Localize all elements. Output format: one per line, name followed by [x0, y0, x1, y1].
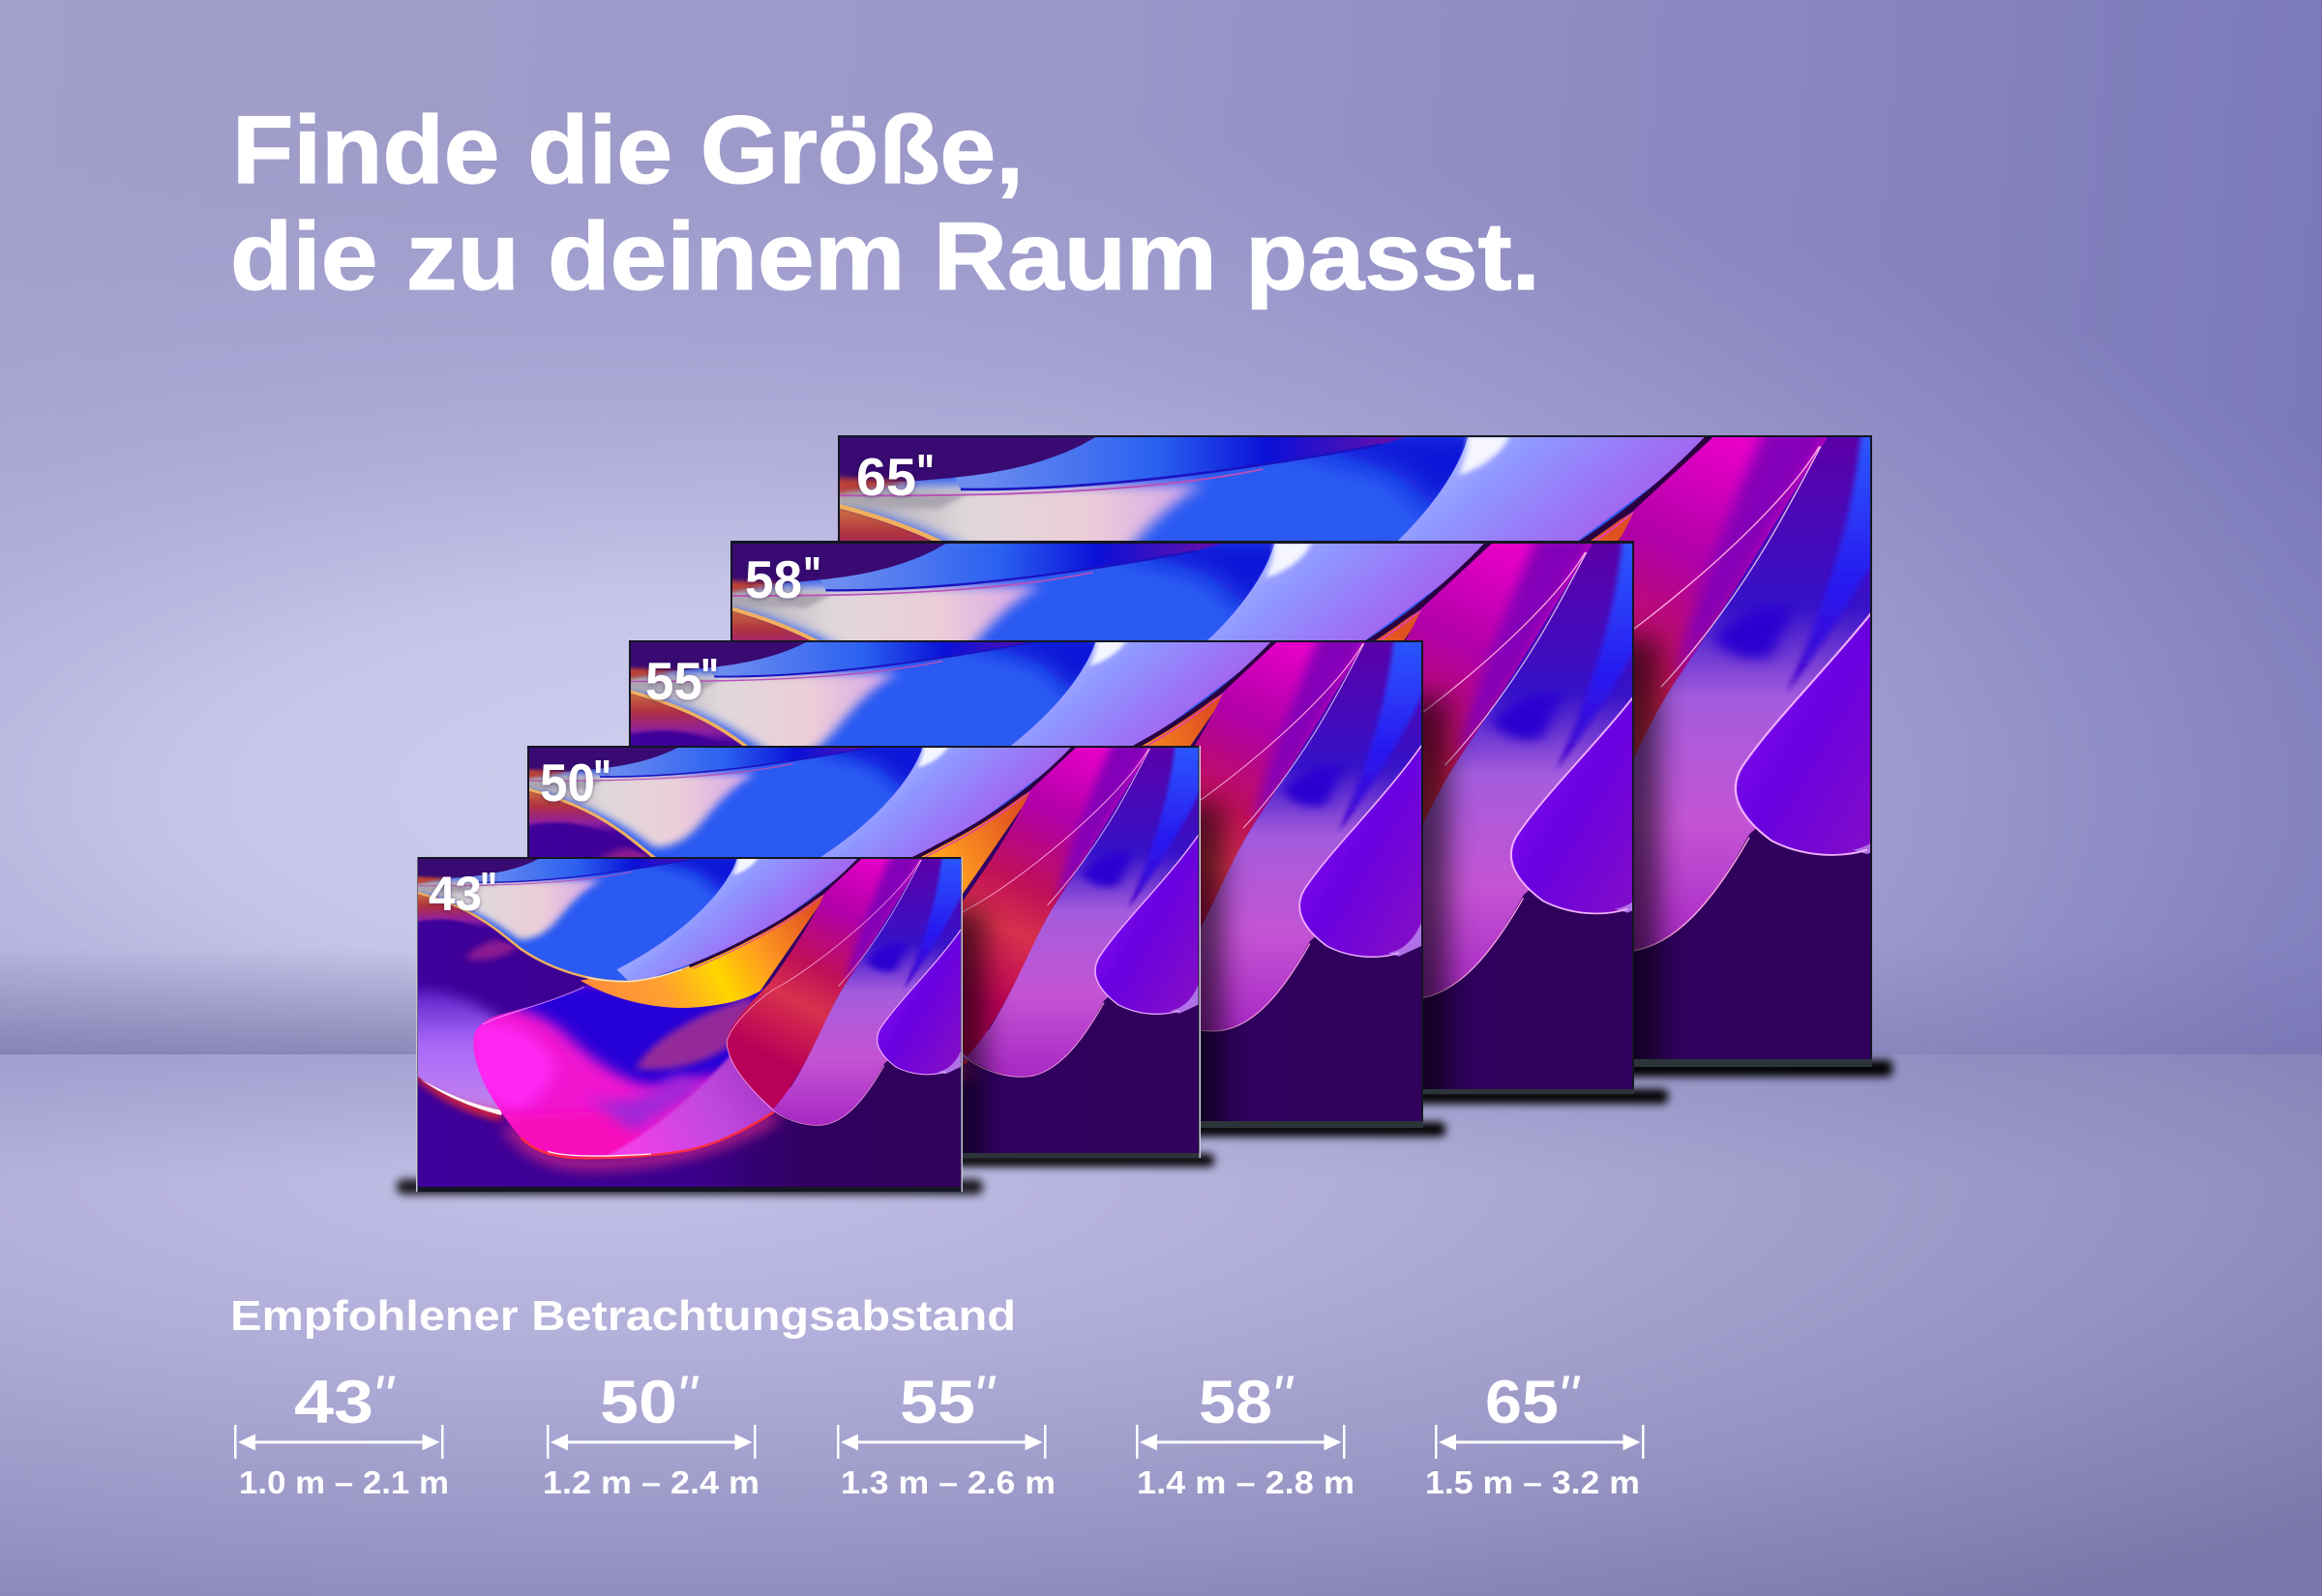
- screen artwork 58: [732, 544, 1632, 1089]
- size label 50: 50: [540, 753, 595, 813]
- background: floor: [0, 1054, 2322, 1596]
- tv: 58 inch: [701, 532, 1668, 1112]
- distance item: 43 inch: 43: [294, 1369, 373, 1436]
- shadow on 50 from 43: [963, 889, 1004, 1153]
- dimension arrow: [234, 1425, 443, 1459]
- title: [230, 96, 1540, 310]
- size label 65: ": [916, 445, 935, 501]
- size label 43: 43: [429, 867, 482, 921]
- distance item: 50 inch: ": [675, 1364, 700, 1429]
- dimension arrow: [547, 1425, 757, 1459]
- size label 55: 55: [645, 651, 702, 711]
- size label 55: ": [700, 649, 719, 705]
- distance item: 65 inch: [1425, 1364, 1645, 1500]
- screen artwork 55: [631, 642, 1421, 1121]
- shadow on 55 from 50: [1201, 783, 1243, 1121]
- tv: 55 inch: [609, 626, 1445, 1137]
- size label 50: ": [593, 751, 611, 807]
- distance item: 43 inch: 1.0 m – 2.1 m: [239, 1464, 449, 1500]
- screen artwork 65: [840, 437, 1870, 1059]
- distance item: 58 inch: 1.4 m – 2.8 m: [1137, 1464, 1354, 1500]
- tv: 65 inch: [820, 423, 1912, 1080]
- size label 58: 58: [745, 549, 802, 609]
- screen artwork 50: [529, 748, 1198, 1153]
- distance item: 55 inch: 55: [900, 1369, 975, 1436]
- shadow on 65 from 58: [1634, 619, 1680, 1059]
- distance item: 58 inch: ": [1270, 1364, 1295, 1429]
- distance item: 50 inch: 50: [600, 1369, 677, 1436]
- title: die zu deinem Raum passt.: [230, 202, 1540, 310]
- distance item: 55 inch: ": [972, 1364, 997, 1429]
- distance item: 55 inch: 1.3 m – 2.6 m: [841, 1464, 1056, 1500]
- distance item: 58 inch: [1136, 1364, 1354, 1500]
- distance item: 43 inch: [234, 1364, 449, 1500]
- dimension arrow: [837, 1425, 1047, 1459]
- tv: 50 inch: [511, 734, 1214, 1167]
- distance item: 50 inch: 1.2 m – 2.4 m: [543, 1464, 759, 1500]
- size label 43: ": [480, 864, 497, 915]
- title: Finde die Größe,: [232, 96, 1024, 203]
- dimension arrow: [1435, 1425, 1645, 1459]
- distance item: 65 inch: 65: [1485, 1369, 1559, 1436]
- screen artwork 43: [418, 859, 961, 1187]
- distance item: 43 inch: ": [372, 1364, 396, 1429]
- distance item: 50 inch: [543, 1364, 759, 1500]
- heading: recommended viewing distance: Empfohlener Betrachtungsabstand: [230, 1292, 1016, 1340]
- dimension arrow: [1136, 1425, 1345, 1459]
- shadow on 58 from 55: [1423, 678, 1469, 1089]
- background: wall: [0, 0, 2322, 1056]
- size label 65: 65: [856, 447, 916, 507]
- size label 58: ": [803, 547, 821, 604]
- distance item: 65 inch: ": [1557, 1364, 1581, 1429]
- distance item: 55 inch: [837, 1364, 1056, 1500]
- distance item: 58 inch: 58: [1199, 1369, 1272, 1436]
- distance item: 65 inch: 1.5 m – 3.2 m: [1425, 1464, 1640, 1500]
- tv: 43 inch: [397, 847, 983, 1195]
